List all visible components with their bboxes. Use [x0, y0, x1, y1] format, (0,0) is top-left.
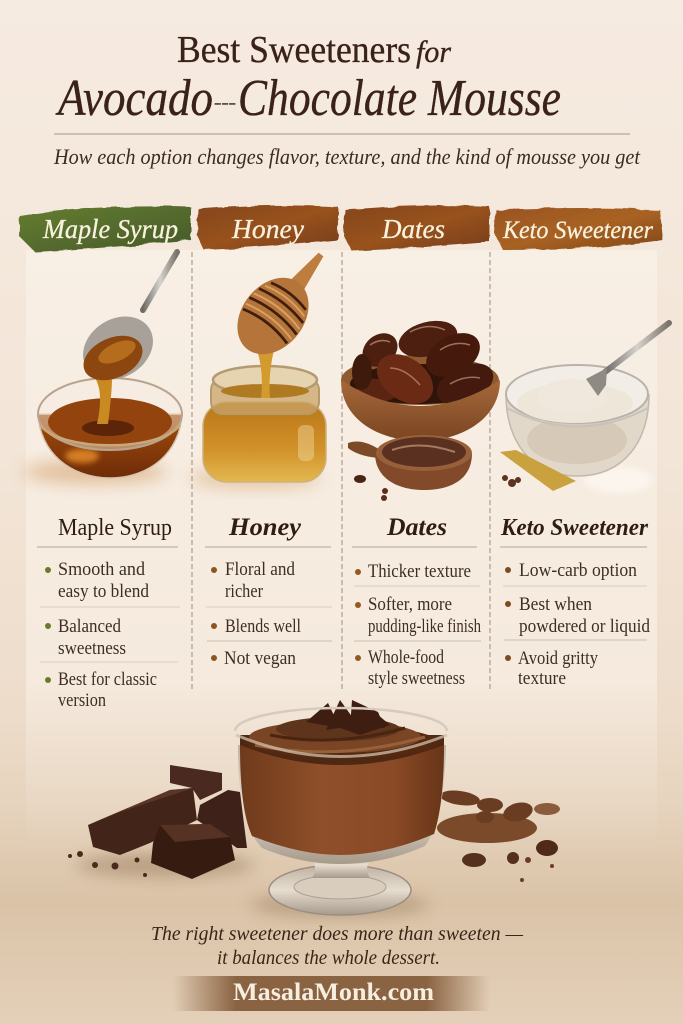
bullets: Dates: Softer, more	[368, 594, 452, 615]
column: Honey	[205, 514, 332, 669]
heading: Honey: Honey	[228, 514, 302, 541]
title: Avocado	[55, 70, 213, 127]
banner: Keto Sweetener: Keto Sweetener	[502, 217, 653, 244]
bullets: Keto Sweetener	[518, 560, 650, 689]
banner: Honey	[197, 205, 338, 250]
photo: dates in wooden bowl	[341, 315, 500, 501]
bullets: Maple Syrup: Best for classic	[58, 669, 157, 690]
banner: Dates	[343, 206, 490, 251]
photo: honey jar and dipper	[189, 235, 345, 488]
heading: Maple Syrup: Maple Syrup	[58, 515, 172, 541]
bullets: Keto Sweetener: powdered or liquid	[519, 616, 650, 637]
column: Keto Sweetener	[500, 515, 650, 689]
title: Chocolate Mousse	[238, 70, 561, 127]
bullets: Dates: pudding-like finish	[368, 616, 481, 637]
bullets: Honey: Floral and	[225, 559, 295, 580]
bullets: Honey	[224, 559, 301, 669]
photo: keto sweetener bowl, spoon and packet	[500, 323, 669, 493]
footer brand: MasalaMonk.com	[233, 979, 434, 1006]
bullets: Dates: Thicker texture	[368, 561, 471, 582]
photo: maple syrup bowl and spoon	[23, 252, 182, 484]
footer brand	[173, 976, 490, 1011]
heading: Dates: Dates	[386, 514, 447, 541]
caption: The right sweetener does more than sweeten —	[151, 924, 524, 945]
banner: Maple Syrup: Maple Syrup	[42, 214, 178, 244]
banner: Keto Sweetener	[494, 208, 663, 250]
banner: Maple Syrup	[19, 206, 191, 252]
photo: glass of chocolate mousse	[235, 700, 447, 917]
column: Maple Syrup	[37, 515, 180, 711]
bullets: Maple Syrup: easy to blend	[58, 581, 149, 602]
title: Best Sweeteners	[177, 29, 411, 71]
banner: Dates: Dates	[381, 214, 445, 244]
banner: Honey: Honey	[231, 214, 304, 244]
bullets: Keto Sweetener: Low-carb option	[519, 560, 637, 581]
title: for	[416, 34, 452, 69]
bullets: Maple Syrup: sweetness	[58, 638, 126, 659]
photo: chocolate chunks	[68, 765, 255, 879]
bullets: Maple Syrup: Smooth and	[58, 559, 145, 580]
title	[55, 29, 561, 127]
bullets: Dates: Whole-food	[368, 647, 444, 668]
caption	[151, 924, 524, 969]
bullets: Maple Syrup	[58, 559, 157, 711]
panel: comparison backdrop	[26, 250, 657, 850]
bullets: Keto Sweetener: Best when	[519, 594, 592, 615]
subtitle: How each option changes flavor, texture, and the kind of mousse you get	[53, 144, 641, 169]
bullets: Dates	[368, 561, 481, 689]
bullets: Honey: richer	[225, 581, 264, 602]
heading: Keto Sweetener: Keto Sweetener	[500, 515, 649, 541]
column: Dates	[352, 514, 481, 689]
bullets: Maple Syrup: version	[58, 690, 106, 711]
title: ---	[214, 96, 237, 111]
bullets: Honey: Not vegan	[224, 648, 296, 669]
bullets: Keto Sweetener: Avoid gritty	[518, 648, 598, 669]
bullets: Dates: style sweetness	[368, 668, 465, 689]
bullets: Maple Syrup: Balanced	[58, 616, 121, 637]
caption: it balances the whole dessert.	[217, 948, 440, 969]
photo: wooden spoon with cocoa beans	[437, 788, 560, 882]
bullets: Honey: Blends well	[225, 616, 301, 637]
bullets: Keto Sweetener: texture	[518, 668, 566, 689]
